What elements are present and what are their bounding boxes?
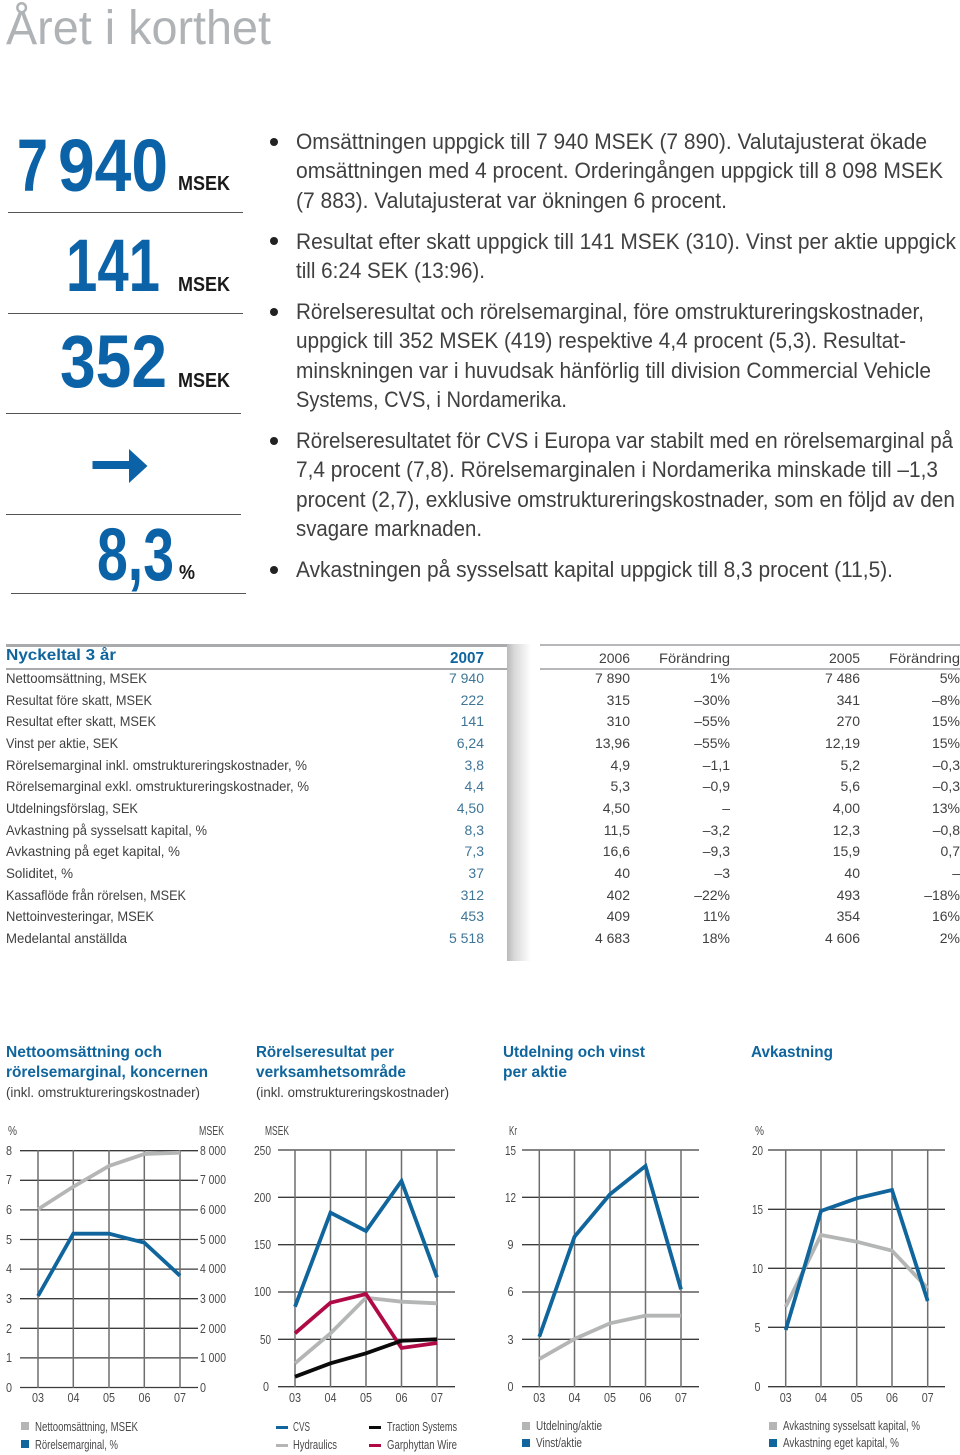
line chart 1: 07 — [174, 1390, 186, 1405]
table row labels: Kassaflöde från rörelsen, MSEK — [6, 887, 187, 903]
panel: chart net sales and margin — [6, 1044, 226, 1452]
table row labels: Avkastning på eget kapital, % — [6, 843, 180, 859]
text block: bullet list — [270, 129, 957, 582]
heading: chart 1: (inkl. omstruktureringskostnader) — [6, 1084, 200, 1100]
heading: chart 1: Nettoomsättning och — [6, 1044, 162, 1061]
line chart 3: 9 — [508, 1237, 514, 1252]
line chart 1: 8 — [6, 1143, 12, 1158]
table column change 2006/2005: 5% — [940, 670, 960, 686]
line chart 2: 200 — [254, 1190, 271, 1205]
table column change 2006/2005: –18% — [924, 887, 960, 903]
table column 2005: 341 — [837, 692, 860, 708]
legend chart 4: Avkastning eget kapital, % — [783, 1435, 899, 1450]
table header: 2006 — [599, 650, 630, 666]
table header: Nyckeltal 3 år — [6, 646, 116, 664]
line chart 1: 3 000 — [200, 1291, 226, 1306]
line chart 1: 5 — [6, 1232, 12, 1247]
line chart 2: 05 — [360, 1390, 372, 1405]
text block: bullet list: till 6:24 SEK (13:96). — [296, 258, 485, 283]
line chart 1: 7 000 — [200, 1172, 226, 1187]
table column change 2007/2006: –3,2 — [703, 822, 730, 838]
text block: bullet list: Systems, CVS, i Nordamerika. — [296, 387, 567, 412]
table row labels: Vinst per aktie, SEK — [6, 735, 119, 751]
line chart 3: 12 — [505, 1190, 516, 1205]
table column 2007: 141 — [461, 713, 484, 729]
line chart 1: 2 000 — [200, 1321, 226, 1336]
table column 2005: 12,19 — [825, 735, 860, 751]
table column 2007: 312 — [461, 887, 484, 903]
table: key ratios — [6, 644, 960, 961]
line chart 1: 6 000 — [200, 1202, 226, 1217]
icon: arrow — [92, 449, 148, 483]
heading: chart 4: Avkastning — [751, 1044, 833, 1061]
heading: chart 3 — [503, 1044, 646, 1081]
table column 2007 — [449, 670, 484, 946]
table column 2006: 5,3 — [611, 778, 630, 794]
table column 2007: 7,3 — [465, 843, 484, 859]
legend chart 1: Nettoomsättning, MSEK — [35, 1419, 138, 1434]
line chart 1: 03 — [32, 1390, 44, 1405]
key figure: result after tax — [8, 224, 243, 314]
key figure: return on capital: 8,3 — [97, 513, 174, 596]
table column 2006: 310 — [607, 713, 630, 729]
line chart 4 — [752, 1123, 945, 1405]
table column change 2007/2006: –22% — [694, 887, 730, 903]
line chart 1: 3 — [6, 1291, 12, 1306]
table column 2007: 4,4 — [465, 778, 484, 794]
table column 2006: 13,96 — [595, 735, 630, 751]
table column change 2006/2005: –0,3 — [933, 757, 960, 773]
heading: chart 2: verksamhetsområde — [256, 1063, 406, 1081]
table column 2005 — [825, 670, 860, 946]
line chart 2: 03 — [289, 1390, 301, 1405]
table column 2005: 354 — [837, 908, 860, 924]
line chart 1: % — [8, 1123, 17, 1138]
table column change 2006/2005: 15% — [932, 713, 960, 729]
table column change 2007/2006: 11% — [703, 908, 730, 924]
table column 2005: 5,6 — [841, 778, 860, 794]
table column 2005: 4,00 — [833, 800, 860, 816]
key figure: return on capital — [6, 513, 246, 596]
line chart 4: 07 — [922, 1390, 934, 1405]
table row labels: Soliditet, % — [6, 865, 73, 881]
line chart 4: 20 — [752, 1143, 763, 1158]
heading: chart 3: Utdelning och vinst — [503, 1044, 646, 1061]
table row labels: Nettoomsättning, MSEK — [6, 670, 148, 686]
table column 2007: 4,50 — [457, 800, 484, 816]
heading: chart 1 — [6, 1044, 208, 1100]
key figure: net sales — [8, 124, 243, 213]
text block: bullet list: minskningen var i huvudsak hänförlig till division Commercial Vehicle — [296, 358, 931, 383]
table column 2005: 4 606 — [825, 930, 860, 946]
key figure: operating result — [6, 320, 241, 414]
legend chart 3: Utdelning/aktie — [536, 1418, 602, 1433]
table column 2006: 16,6 — [603, 843, 630, 859]
line chart 1: 05 — [103, 1390, 115, 1405]
key figure: operating result: MSEK — [178, 370, 230, 392]
table column change 2007/2006: –55% — [694, 735, 730, 751]
table column 2006: 7 890 — [595, 670, 630, 686]
line chart 1: 8 000 — [200, 1143, 226, 1158]
table column change 2006/2005: 2% — [940, 930, 960, 946]
text block: bullet list: uppgick till 352 MSEK (419) respektive 4,4 procent (5,3). Resultat- — [296, 328, 906, 353]
table column change 2006/2005: – — [952, 865, 960, 881]
line chart 3: 0 — [508, 1379, 514, 1394]
legend chart 3: Vinst/aktie — [536, 1435, 582, 1450]
line chart 3: 3 — [508, 1332, 514, 1347]
table column 2007: 222 — [461, 692, 484, 708]
key figure: return on capital: % — [179, 562, 195, 584]
line chart 4: 10 — [752, 1261, 763, 1276]
line chart 3 — [505, 1123, 699, 1405]
line chart 4: % — [755, 1123, 764, 1138]
table header: 2005 — [829, 650, 860, 666]
table column 2006: 11,5 — [604, 822, 630, 838]
table column 2006: 315 — [607, 692, 630, 708]
text block: bullet list: 7,4 procent (7,8). Rörelsemarginalen i Nordamerika minskade till –1,3 — [296, 457, 938, 482]
line chart 1: 06 — [138, 1390, 150, 1405]
line chart 1: 4 000 — [200, 1261, 226, 1276]
line chart 3: 15 — [505, 1143, 516, 1158]
table column change 2007/2006: –0,9 — [703, 778, 730, 794]
table column 2007: 7 940 — [449, 670, 484, 686]
line chart 3: 04 — [568, 1390, 580, 1405]
table header: Förändring — [659, 650, 730, 666]
line chart 3: Kr — [509, 1123, 517, 1138]
table row labels: Resultat efter skatt, MSEK — [6, 713, 157, 729]
line chart 3: 03 — [533, 1390, 545, 1405]
line chart 1: 1 000 — [200, 1350, 226, 1365]
key figure: result after tax: MSEK — [178, 274, 230, 296]
table column change 2006/2005: –8% — [932, 692, 960, 708]
line chart 4: 04 — [815, 1390, 827, 1405]
line chart 4: 0 — [754, 1379, 760, 1394]
table column change 2006/2005: 13% — [932, 800, 960, 816]
table column 2006: 4,50 — [603, 800, 630, 816]
line chart 3: 05 — [604, 1390, 616, 1405]
table column 2007: 453 — [461, 908, 484, 924]
table row labels: Utdelningsförslag, SEK — [6, 800, 139, 816]
text block: bullet list: Rörelseresultat och rörelsemarginal, före omstruktureringskostnader, — [296, 299, 924, 324]
table column change 2006/2005: –0,8 — [933, 822, 960, 838]
line chart 2: 100 — [254, 1284, 271, 1299]
line chart 1: 4 — [6, 1261, 12, 1276]
text block: bullet list: (7 883). Valutajusterat var ökningen 6 procent. — [296, 188, 727, 213]
line chart 2: 0 — [263, 1379, 269, 1394]
line chart 2: MSEK — [265, 1123, 289, 1138]
line chart 2: 04 — [324, 1390, 336, 1405]
table column change 2007/2006: – — [722, 800, 730, 816]
table column 2006: 4 683 — [595, 930, 630, 946]
table column 2005: 15,9 — [833, 843, 860, 859]
legend chart 3 — [522, 1418, 602, 1450]
key figure: net sales: MSEK — [178, 173, 230, 195]
table column 2006: 40 — [614, 865, 630, 881]
line chart 4: 5 — [754, 1320, 760, 1335]
legend chart 2: CVS — [293, 1419, 310, 1434]
text block: bullet list: Avkastningen på sysselsatt kapital uppgick till 8,3 procent (11,5). — [296, 557, 893, 582]
line chart 1: 5 000 — [200, 1232, 226, 1247]
text block: bullet list: svagare marknaden. — [296, 516, 482, 541]
table column 2005: 7 486 — [825, 670, 860, 686]
table column 2007: 3,8 — [465, 757, 484, 773]
table column 2007: 37 — [468, 865, 484, 881]
line chart 1: 0 — [200, 1380, 206, 1395]
table column 2007: 8,3 — [465, 822, 484, 838]
line chart 4: 15 — [752, 1202, 763, 1217]
key figure: operating result: 352 — [60, 320, 167, 403]
table row labels — [6, 670, 309, 946]
line chart 1: 0 — [6, 1380, 12, 1395]
heading: chart 2: Rörelseresultat per — [256, 1044, 394, 1061]
table row labels: Rörelsemarginal inkl. omstruktureringskostnader, % — [6, 757, 307, 773]
table column 2006: 409 — [607, 908, 630, 924]
table row labels: Avkastning på sysselsatt kapital, % — [6, 822, 207, 838]
key figure: net sales: 7 — [17, 124, 48, 207]
text block: bullet list: omsättningen med 4 procent. Orderingången uppgick till 8 098 MSEK — [296, 158, 943, 183]
legend chart 1 — [21, 1419, 138, 1452]
legend chart 2: Hydraulics — [293, 1437, 337, 1452]
legend chart 4 — [769, 1418, 920, 1450]
table column change 2007/2006: –1,1 — [703, 757, 730, 773]
line chart 2: 250 — [254, 1143, 271, 1158]
table column change 2006/2005 — [924, 670, 960, 946]
panel: chart return — [751, 1044, 945, 1450]
title: Året i korthet — [6, 2, 271, 55]
heading: chart 2: (inkl. omstruktureringskostnader) — [256, 1084, 449, 1100]
table column 2006: 402 — [607, 887, 630, 903]
line chart 1: 7 — [6, 1172, 12, 1187]
table column 2005: 493 — [837, 887, 860, 903]
table column change 2007/2006: 18% — [702, 930, 730, 946]
line chart 1: 1 — [6, 1350, 12, 1365]
line chart 1: 04 — [68, 1390, 80, 1405]
table header: 2007 — [450, 650, 484, 667]
legend chart 2: Traction Systems — [387, 1419, 457, 1434]
table column change 2007/2006: 1% — [710, 670, 730, 686]
table column 2005: 270 — [837, 713, 860, 729]
table column change 2007/2006: –3 — [714, 865, 730, 881]
table column 2007: 6,24 — [457, 735, 484, 751]
table column change 2006/2005: 15% — [932, 735, 960, 751]
table column change 2007/2006: –9,3 — [703, 843, 730, 859]
panel: key figures — [6, 124, 246, 596]
table row labels: Nettoinvesteringar, MSEK — [6, 908, 155, 924]
table column change 2006/2005: 0,7 — [941, 843, 960, 859]
table column change 2007/2006: –30% — [694, 692, 730, 708]
table header — [6, 646, 960, 667]
table column 2005: 5,2 — [841, 757, 860, 773]
line chart 2: 06 — [396, 1390, 408, 1405]
table column 2006: 4,9 — [611, 757, 630, 773]
table column change 2007/2006 — [694, 670, 730, 946]
panel: chart operating result per business area — [254, 1044, 457, 1452]
table row labels: Rörelsemarginal exkl. omstruktureringskostnader, % — [6, 778, 309, 794]
line chart 1: MSEK — [199, 1123, 224, 1138]
table header: Förändring — [889, 650, 960, 666]
panel: chart dividend and earnings per share — [503, 1044, 699, 1450]
heading: chart 1: rörelsemarginal, koncernen — [6, 1064, 208, 1081]
line chart 2 — [254, 1123, 455, 1405]
table column 2005: 40 — [844, 865, 860, 881]
legend chart 1: Rörelsemarginal, % — [35, 1437, 118, 1452]
legend chart 2 — [276, 1419, 457, 1452]
line chart 1: 2 — [6, 1321, 12, 1336]
table column change 2006/2005: 16% — [932, 908, 960, 924]
line chart 2: 07 — [431, 1390, 443, 1405]
legend chart 2: Garphyttan Wire — [387, 1437, 457, 1452]
line chart 4: 05 — [851, 1390, 863, 1405]
line chart 3: 6 — [508, 1284, 514, 1299]
table row labels: Resultat före skatt, MSEK — [6, 692, 153, 708]
line chart 4: 06 — [886, 1390, 898, 1405]
table row labels: Medelantal anställda — [6, 930, 127, 946]
table column 2006 — [595, 670, 630, 946]
table column change 2007/2006: –55% — [694, 713, 730, 729]
line chart 2: 50 — [260, 1332, 271, 1347]
table column change 2006/2005: –0,3 — [933, 778, 960, 794]
table column 2007: 5 518 — [449, 930, 484, 946]
table column 2005: 12,3 — [833, 822, 860, 838]
key figure: result after tax: 141 — [66, 224, 160, 307]
line chart 3: 07 — [675, 1390, 687, 1405]
heading: chart 3: per aktie — [503, 1064, 567, 1081]
key figure: net sales: 940 — [58, 124, 168, 207]
line chart 4: 03 — [780, 1390, 792, 1405]
line chart 1: 6 — [6, 1202, 12, 1217]
text block: bullet list: Omsättningen uppgick till 7 940 MSEK (7 890). Valutajusterat ökade — [296, 129, 927, 154]
line chart 2: 150 — [254, 1237, 271, 1252]
line chart 1 — [6, 1123, 226, 1405]
heading: chart 2 — [256, 1044, 449, 1100]
line chart 3: 06 — [640, 1390, 652, 1405]
